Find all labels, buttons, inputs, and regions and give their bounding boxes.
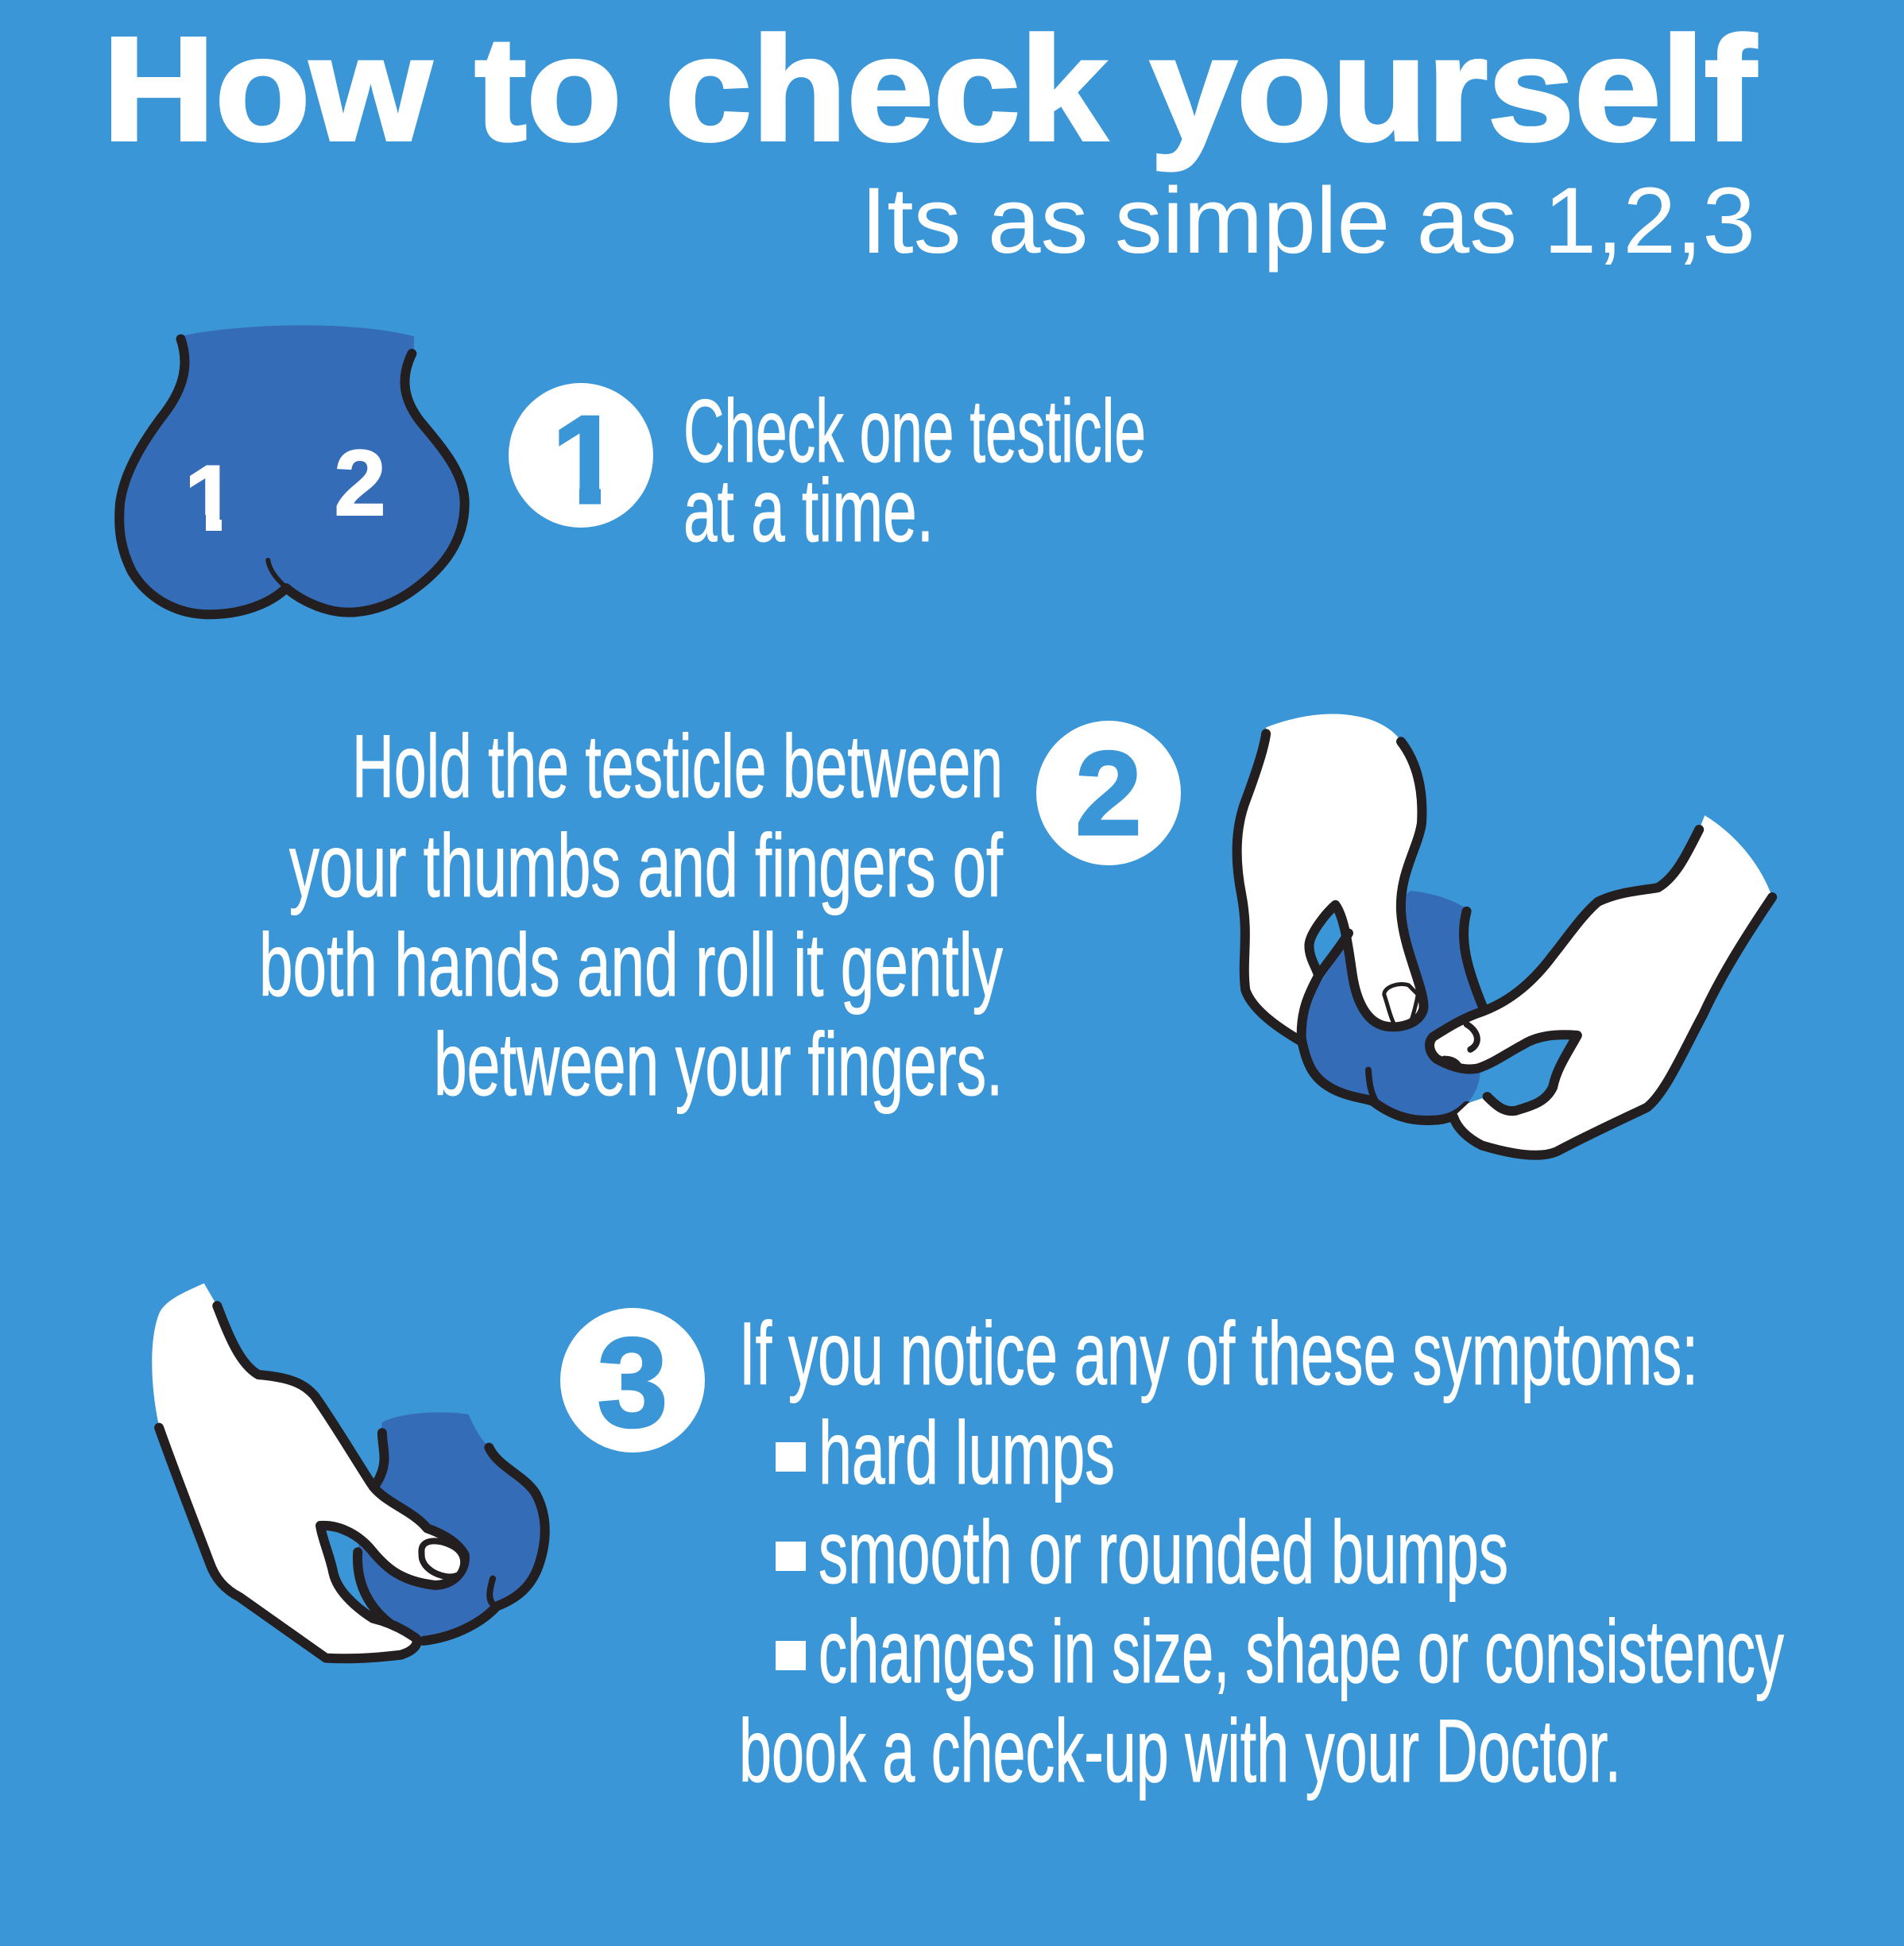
- panel: step 1: [119, 325, 1146, 614]
- number badge 2: [1036, 721, 1181, 865]
- title: How to check yourself: [103, 7, 1757, 172]
- text: step 1 instruction: Check one testicle: [683, 381, 1146, 481]
- text: step 1 instruction: [683, 381, 1146, 560]
- number badge 1: 1: [551, 390, 621, 530]
- text: step 1 instruction: at a time.: [683, 461, 934, 560]
- icon: scrotum with numbered testicles: 1: [184, 446, 236, 550]
- icon: scrotum with numbered testicles: 2: [334, 431, 386, 535]
- number badge 1: [509, 383, 653, 530]
- panel: step 2: [259, 714, 1772, 1155]
- icon: scrotum with numbered testicles: [119, 325, 465, 614]
- icon: two hands rolling testicle: [1237, 714, 1772, 1155]
- number badge 2: 2: [1075, 726, 1142, 860]
- number badge 3: [560, 1308, 705, 1453]
- text: step 2 instruction: both hands and roll it gently: [259, 915, 1003, 1015]
- list: symptoms: [776, 1403, 1784, 1701]
- text: step 2 instruction: Hold the testicle between: [352, 717, 1003, 816]
- number badge 3: 3: [598, 1311, 668, 1453]
- panel: step 3: [152, 1283, 1784, 1801]
- list: symptoms: smooth or rounded bumps: [818, 1503, 1508, 1602]
- text: step 2 instruction: your thumbs and fingers of: [289, 816, 1004, 915]
- text: step 2 instruction: between your fingers.: [434, 1015, 1003, 1114]
- icon: one hand checking testicle: [152, 1283, 545, 1658]
- list: symptoms: hard lumps: [818, 1403, 1115, 1503]
- subtitle: Its as simple as 1,2,3: [861, 168, 1755, 273]
- text: step 2 instruction: [259, 717, 1004, 1114]
